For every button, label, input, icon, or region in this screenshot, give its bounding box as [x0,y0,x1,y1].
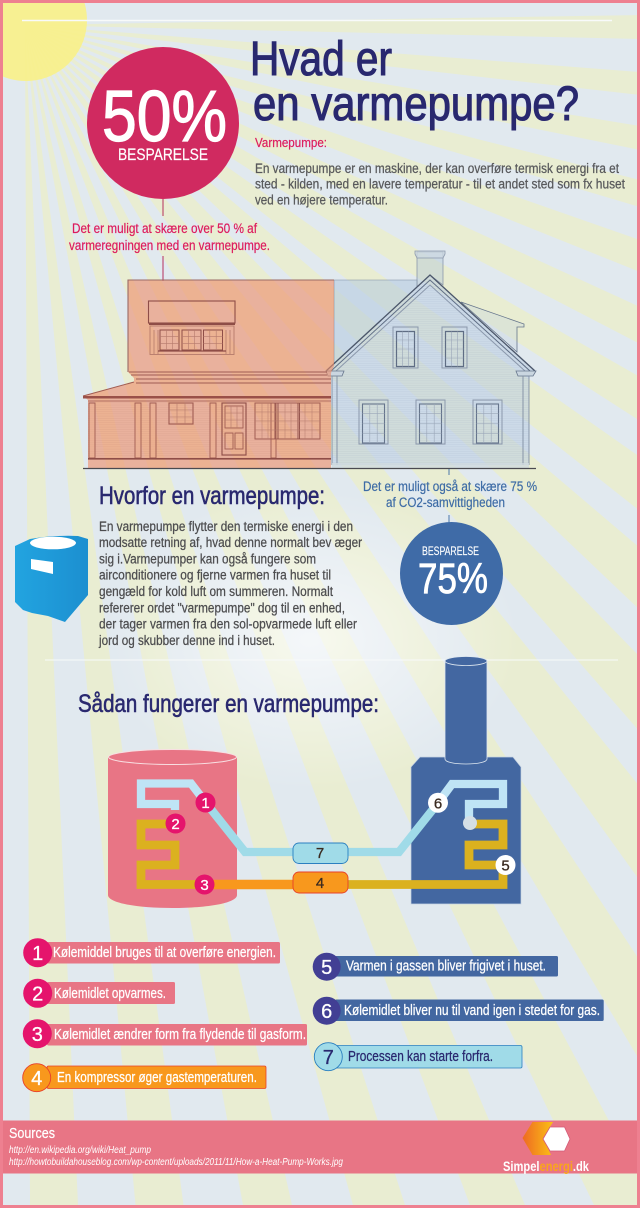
house: blue half [326,251,536,468]
legend item 1: Kølemiddel bruges til at overføre energien. [53,945,276,961]
footer sources: http://howtobuildahouseblog.com/wp-content/uploads/2011/11/How-a-Heat-Pump-Works.jpg [9,1157,343,1168]
callout text: 75% [363,479,537,510]
diagram: pipe end dot [463,816,477,830]
callout text: 75%: Det er muligt også at skære 75 % [363,479,537,494]
legend item 5: 5 [321,957,332,979]
logo: Simpelenergi.dk: Simpelenergi.dk [503,1158,589,1174]
text block: Hvorfor: En varmepumpe flytter den termiske energi i den [99,519,353,534]
callout text: 50%: Det er muligt at skære over 50 % af [72,221,257,236]
legend item 6 [313,997,604,1025]
legend item 2: Kølemidlet opvarmes. [54,986,166,1002]
legend item 2 [23,979,175,1008]
text block: Hvorfor: jord og skubber denne ind i huset. [98,633,275,648]
diagram: pink tank [108,750,237,908]
title [250,33,579,131]
soft glow [100,490,520,790]
callout: 75% savings circle: BESPARELSE [422,544,479,558]
footer sources [9,1125,343,1168]
diagram: blue house unit [411,656,521,904]
house illustration [83,251,536,468]
heading: Sådan fungerer: Sådan fungerer en varmepumpe: [78,690,379,718]
house: ground line [83,468,536,470]
text block: Hvorfor: gengæld for kold luft om summeren. Normalt [99,584,333,599]
legend item 2: 2 [32,984,43,1006]
text block: Hvorfor: modsatte retning af, hvad denne normalt bev æger [99,535,362,550]
title: Hvad er [250,33,392,86]
callout text: 50%: varmeregningen med en varmepumpe. [69,238,270,253]
text block: Hvorfor: airconditionere og fjerne varmen fra huset til [99,568,331,582]
house: orange half [83,280,334,468]
legend item 4: En kompressor øger gastemperaturen. [57,1070,257,1086]
legend item 1: 1 [32,943,43,965]
logo: Simpelenergi.dk [503,1122,589,1174]
diagram: marker 5 [496,855,516,875]
diagram: cold pipe [141,784,503,852]
legend item 1 [23,938,280,967]
callout: 50% savings circle: 50% [102,77,227,157]
text block: Hvorfor: der tager varmen fra den sol-opvarmede luft eller [99,616,357,632]
footer band [0,1120,640,1174]
intro text block: Varmepumpe: [255,135,327,150]
legend item 7 [314,1043,522,1071]
text block: Hvorfor [98,519,362,648]
legend item 7: 7 [323,1047,334,1069]
legend item 5: Varmen i gassen bliver frigivet i huset. [346,958,546,974]
legend item 7: Processen kan starte forfra. [348,1049,493,1065]
text block: Hvorfor: sig i.Varmepumper kan også fungere som [99,552,316,566]
title: en varmepumpe? [253,78,579,131]
diagram: marker 1: 1 [201,795,210,812]
legend item 4 [23,1064,266,1092]
callout: 50% savings circle: BESPARELSE [118,146,208,164]
diagram: box 7: 7 [316,845,324,862]
footer sources: Sources [9,1125,55,1142]
legend item 5 [313,953,558,981]
diagram: warm pipe [141,824,503,884]
diagram: marker 5: 5 [501,858,510,874]
heading: Hvorfor: Hvorfor en varmepumpe: [99,482,325,510]
sun [0,0,87,81]
intro text block: ved en højere temperatur. [255,192,388,208]
diagram: marker 1 [196,792,216,812]
callout: 75% savings circle: 75% [418,555,488,603]
legend item 3: 3 [32,1024,43,1046]
diagram: marker 6 [428,793,448,813]
text block: Hvorfor: refererer ordet "varmepumpe" dog til en enhed, [99,600,345,616]
diagram: marker 2 [166,814,186,834]
diagram: marker 6: 6 [434,796,442,812]
callout text: 50% [69,221,270,253]
intro text block [255,135,625,208]
diagram: box 7 [293,843,348,864]
diagram: marker 2: 2 [171,816,180,833]
diagram: marker 3 [194,874,214,894]
diagram: box 4 [293,872,348,893]
legend item 3 [23,1019,307,1048]
callout text: 75%: af CO2-samvittigheden [386,495,505,510]
diagram: marker 3: 3 [200,877,209,894]
icon: heat pump unit [15,536,88,622]
legend item 6: 6 [321,1001,332,1023]
callout: 50% savings circle [87,47,239,199]
diagram: box 4: 4 [316,875,324,892]
diagram: heat pump cycle [108,656,521,908]
legend item 4: 4 [31,1068,42,1090]
footer sources: http://en.wikipedia.org/wiki/Heat_pump [9,1145,151,1156]
callout: 75% savings circle [400,522,503,625]
legend item 3: Kølemidlet ændrer form fra flydende til gasform. [54,1027,306,1043]
